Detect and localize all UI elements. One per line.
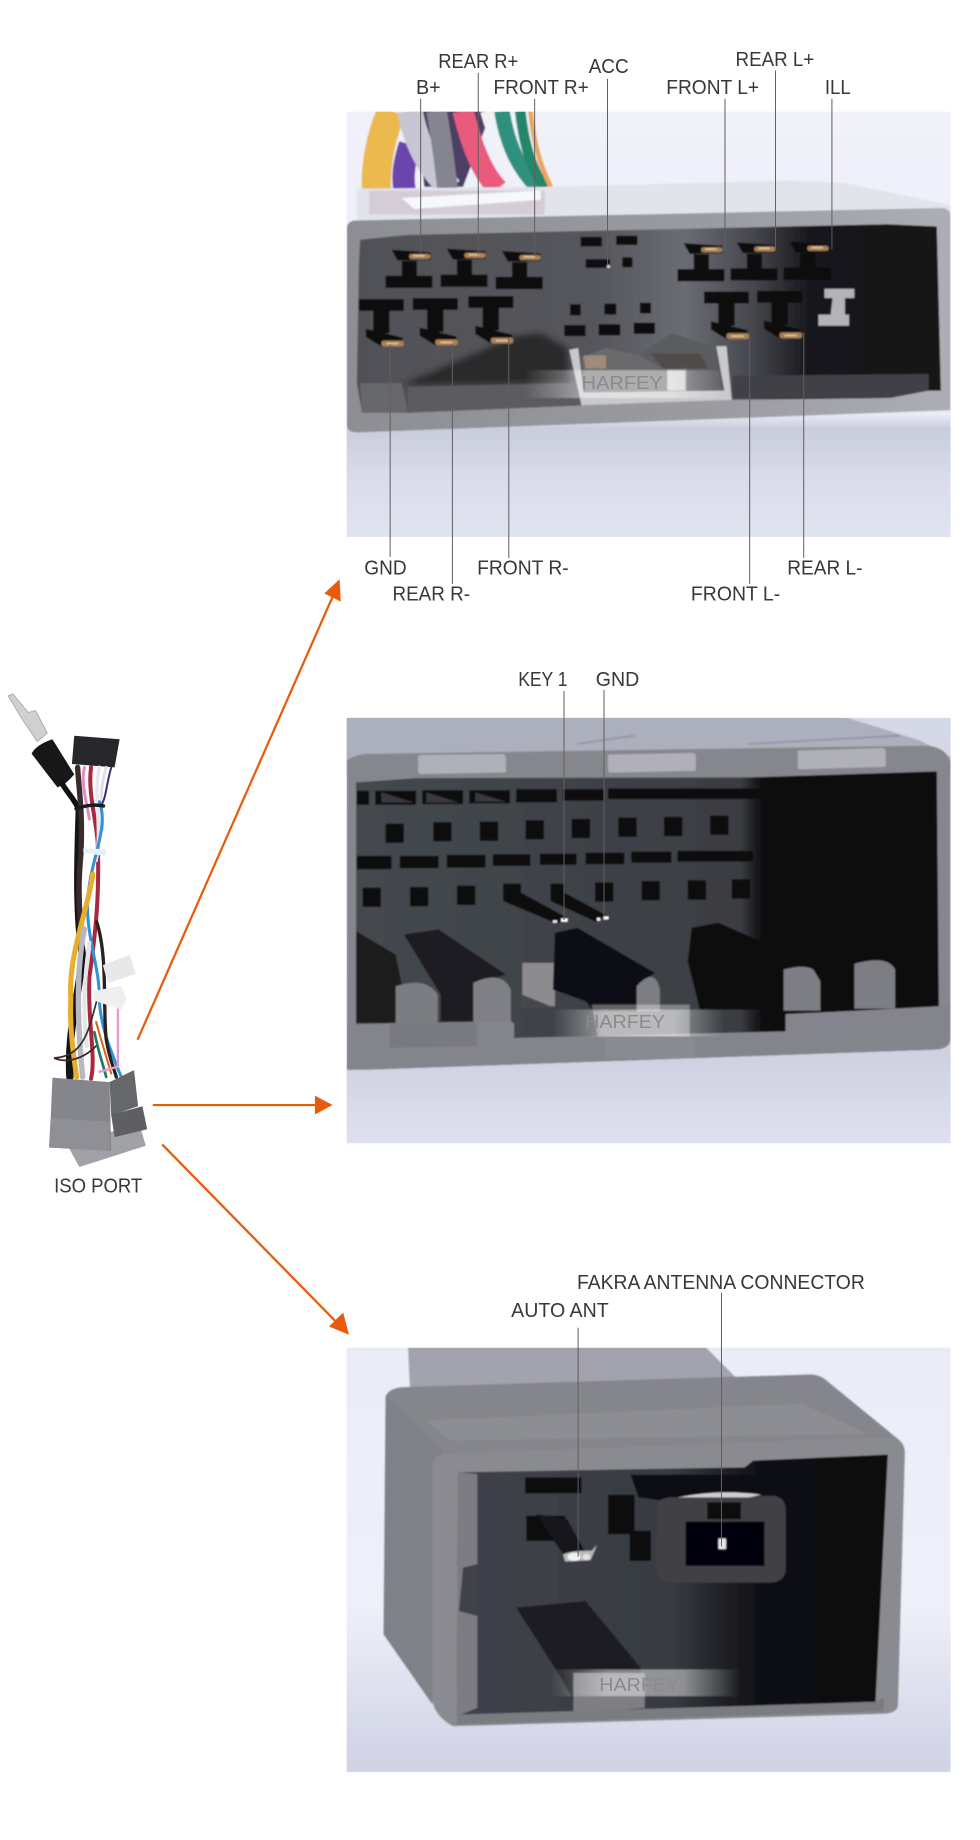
pin names: FRONT R+ xyxy=(494,76,589,99)
grey connector block xyxy=(49,1070,147,1167)
label: ISO PORT: ISO PORT xyxy=(54,1175,143,1198)
pin names: B+ xyxy=(416,76,441,99)
pin names: REAR R+ xyxy=(438,50,518,73)
labels: key connector pins xyxy=(518,668,639,920)
wires xyxy=(54,767,121,1079)
leader lines xyxy=(564,690,604,920)
watermark: HARFEY top: HARFEY xyxy=(582,372,663,393)
interior cavity xyxy=(356,771,939,1038)
watermark band xyxy=(549,1669,741,1696)
black plug xyxy=(72,736,120,767)
lower lip xyxy=(356,1010,848,1030)
body top xyxy=(385,1374,900,1456)
housing interior xyxy=(357,224,941,413)
pin names: REAR L+ xyxy=(736,48,814,71)
fakra socket xyxy=(656,1492,786,1583)
photo: antenna connector xyxy=(341,1344,957,1778)
watermark: HARFEY middle: HARFEY xyxy=(585,1011,666,1032)
cable tie xyxy=(83,848,106,856)
top surface xyxy=(341,714,957,774)
pin names: FRONT L- xyxy=(691,582,780,605)
pin names xyxy=(364,48,862,605)
terminal squares row two xyxy=(363,879,750,907)
pin names: KEY 1 xyxy=(518,668,568,691)
leader lines xyxy=(390,70,832,584)
pin names: REAR L- xyxy=(787,557,862,580)
watermark band xyxy=(524,370,729,398)
watermark: HARFEY bottom: HARFEY xyxy=(599,1674,680,1695)
pin names: FAKRA ANTENNA CONNECTOR xyxy=(577,1271,865,1294)
arrow: to antenna connector xyxy=(162,1144,349,1335)
labels: antenna pins xyxy=(511,1271,865,1557)
latch clip xyxy=(582,348,650,392)
housing rim xyxy=(347,746,951,1070)
interior cavity xyxy=(457,1455,888,1716)
pin names: GND xyxy=(596,668,639,691)
auto ant pin xyxy=(537,1514,597,1562)
pin names xyxy=(511,1271,865,1322)
recess shading xyxy=(402,333,569,385)
pin names xyxy=(518,668,639,691)
antenna slots xyxy=(525,1477,651,1561)
rear cable boot xyxy=(407,1348,736,1388)
pin names: FRONT R- xyxy=(477,557,569,580)
upper contact row xyxy=(385,250,432,288)
leader lines xyxy=(578,1292,721,1557)
arrow: to main connector xyxy=(138,579,341,1040)
lower lip xyxy=(457,1698,884,1725)
pin names: GND xyxy=(364,557,407,580)
wire tags xyxy=(93,955,136,1010)
wiring harness photo xyxy=(8,694,147,1167)
housing front rim xyxy=(347,208,951,432)
photo: key connector xyxy=(341,714,957,1148)
arrow: to key connector xyxy=(153,1096,333,1114)
wire bundle xyxy=(376,111,551,192)
front rim xyxy=(432,1437,905,1726)
pin names: REAR R- xyxy=(392,582,470,605)
fins xyxy=(356,931,402,1023)
terminal squares row one xyxy=(385,815,729,843)
antenna plug xyxy=(8,694,79,810)
pin names: ILL xyxy=(825,76,851,99)
raised tabs xyxy=(418,754,506,774)
terminal slots row two xyxy=(357,851,753,869)
housing top surface xyxy=(357,181,950,220)
pin names: FRONT L+ xyxy=(666,76,759,99)
pin names: ACC xyxy=(589,55,629,78)
body side xyxy=(383,1395,443,1705)
centre slots xyxy=(564,236,655,336)
pins: KEY 1 and GND xyxy=(503,884,567,924)
labels: main connector pins xyxy=(364,48,862,605)
lower contact row xyxy=(359,299,404,346)
terminal slots row one xyxy=(357,788,769,805)
pin names: AUTO ANT xyxy=(511,1299,609,1322)
photo: main connector xyxy=(341,107,957,542)
lower tab xyxy=(516,1601,641,1708)
watermark band xyxy=(553,1010,724,1036)
